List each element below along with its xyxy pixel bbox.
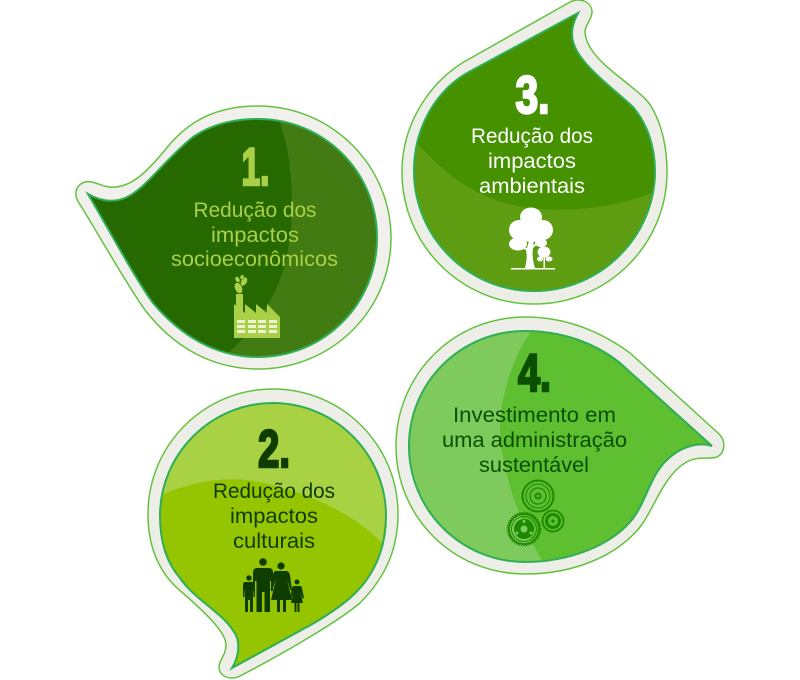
icon: factory (233, 274, 280, 338)
text: administração: uma administração (442, 428, 627, 452)
text: administração (442, 403, 627, 477)
text: culturais (213, 479, 335, 553)
icon: gears (508, 480, 564, 546)
number 1: 1. (242, 138, 270, 197)
panel: drop 4 administração (396, 317, 724, 574)
text: socioeconômicos: socioeconômicos (171, 247, 338, 271)
number 2: 2. (258, 420, 290, 479)
text: culturais: culturais (233, 529, 315, 553)
panel: drop 2 culturais (148, 389, 400, 678)
text: socioeconômicos: Redução dos (194, 198, 316, 222)
icon: tree (509, 208, 555, 270)
text: culturais: Redução dos (213, 479, 335, 503)
text: ambientais: Redução dos (471, 124, 593, 148)
number 3: 3. (516, 66, 550, 125)
text: administração: Investimento em (453, 403, 616, 427)
text: ambientais: impactos (488, 149, 576, 173)
text: socioeconômicos: impactos (211, 223, 299, 247)
text: culturais: impactos (230, 504, 318, 528)
text: ambientais: ambientais (479, 174, 585, 198)
panel: drop 1 socioeconômicos (76, 106, 400, 370)
text: administração: sustentável (479, 453, 589, 477)
number 4: 4. (518, 344, 551, 403)
panel: drop 3 ambientais (400, 0, 670, 304)
text: socioeconômicos (171, 198, 338, 271)
icon: family (243, 558, 304, 612)
text: ambientais (471, 124, 593, 198)
